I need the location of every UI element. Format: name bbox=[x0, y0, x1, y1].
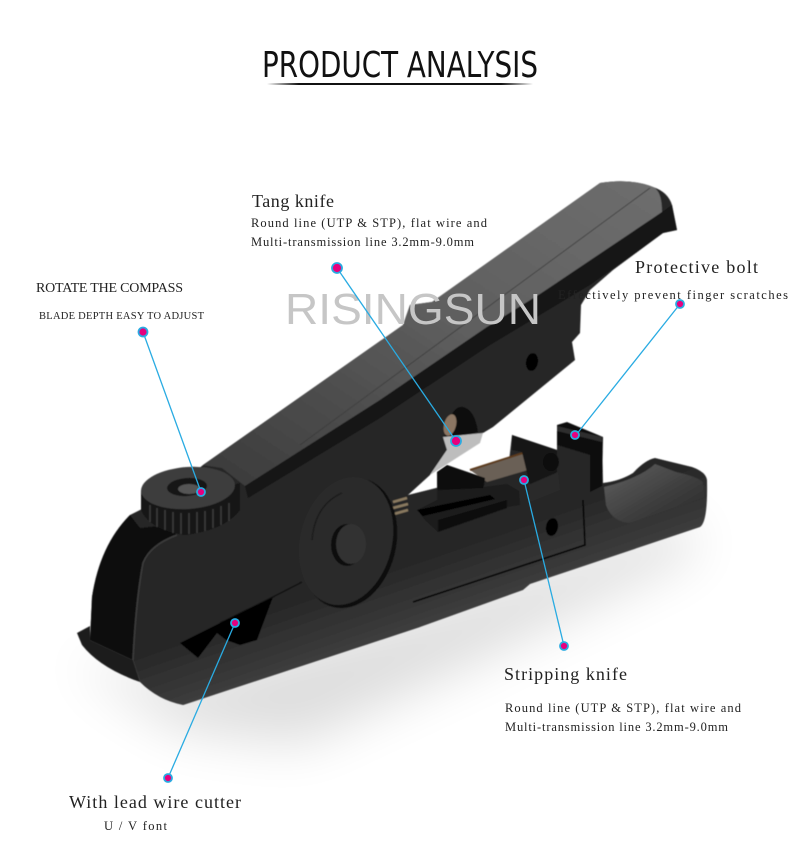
dark side ridge bbox=[245, 205, 677, 498]
text: stripping knife description: Round line (UTP & STP), flat wire and bbox=[505, 701, 742, 715]
text: stripping knife description bbox=[505, 701, 742, 734]
side hole bbox=[545, 517, 559, 537]
leader line bbox=[164, 619, 239, 782]
callout: stripping knife bbox=[504, 476, 742, 734]
callout: tang knife bbox=[251, 191, 488, 446]
protective bolt block bbox=[557, 422, 603, 492]
watermark: RISINGSUN bbox=[285, 285, 541, 334]
face parting line bbox=[300, 188, 650, 445]
adjusting knob bbox=[140, 464, 240, 535]
text: stripping knife description: Multi-transmission line 3.2mm-9.0mm bbox=[505, 720, 728, 734]
slider cavity bbox=[470, 453, 528, 482]
photo: cable stripper tool bbox=[77, 181, 707, 705]
stripping knife piece bbox=[528, 472, 560, 502]
tang blade bbox=[430, 433, 483, 475]
text: U / V font: U / V font bbox=[104, 819, 168, 833]
rear slider block bbox=[512, 435, 557, 485]
blade window bbox=[444, 407, 478, 440]
callout: protective bolt bbox=[558, 257, 788, 439]
text: tang knife description: Round line (UTP & STP), flat wire and bbox=[251, 216, 488, 230]
callout: rotate the compass bbox=[36, 281, 205, 496]
jaw inner surface bbox=[604, 464, 704, 523]
head highlight bbox=[133, 535, 177, 660]
upper hole bbox=[525, 352, 539, 372]
text: tang knife description: Multi-transmission line 3.2mm-9.0mm bbox=[251, 235, 474, 249]
text: protective bolt description: Effectively prevent finger scratches bbox=[558, 288, 788, 302]
recess bbox=[438, 500, 507, 532]
seam bbox=[220, 582, 302, 623]
spring bbox=[393, 498, 408, 514]
head crescent bbox=[90, 515, 177, 660]
leader line bbox=[138, 328, 205, 496]
cutter opening bbox=[180, 597, 273, 658]
spring screw bbox=[441, 413, 459, 437]
pivot disc and bolt bbox=[286, 467, 411, 618]
upper handle and head bbox=[77, 181, 677, 705]
heading: protective bolt: Protective bolt bbox=[635, 257, 758, 277]
heading: stripping knife: Stripping knife bbox=[504, 664, 627, 684]
front slider block bbox=[417, 465, 520, 532]
leader line bbox=[520, 476, 568, 650]
roller pin bbox=[543, 453, 559, 471]
callout: lead wire cutter bbox=[69, 619, 241, 833]
leader line bbox=[332, 263, 461, 446]
text: tang knife description bbox=[251, 216, 488, 249]
leader line bbox=[571, 300, 684, 439]
soft floor shadow bbox=[70, 520, 700, 745]
text: blade depth: BLADE DEPTH EASY TO ADJUST bbox=[39, 311, 205, 322]
side groove bbox=[413, 500, 585, 602]
heading: tang knife: Tang knife bbox=[252, 191, 334, 211]
lower arm and jaw bbox=[183, 422, 707, 705]
slot bbox=[417, 495, 495, 516]
grey top face of handle bbox=[203, 181, 662, 486]
heading: lead wire cutter: With lead wire cutter bbox=[69, 792, 241, 812]
heading: rotate the compass: ROTATE THE COMPASS bbox=[36, 281, 183, 296]
title: PRODUCT ANALYSIS bbox=[262, 45, 538, 86]
head tip bbox=[77, 626, 140, 682]
